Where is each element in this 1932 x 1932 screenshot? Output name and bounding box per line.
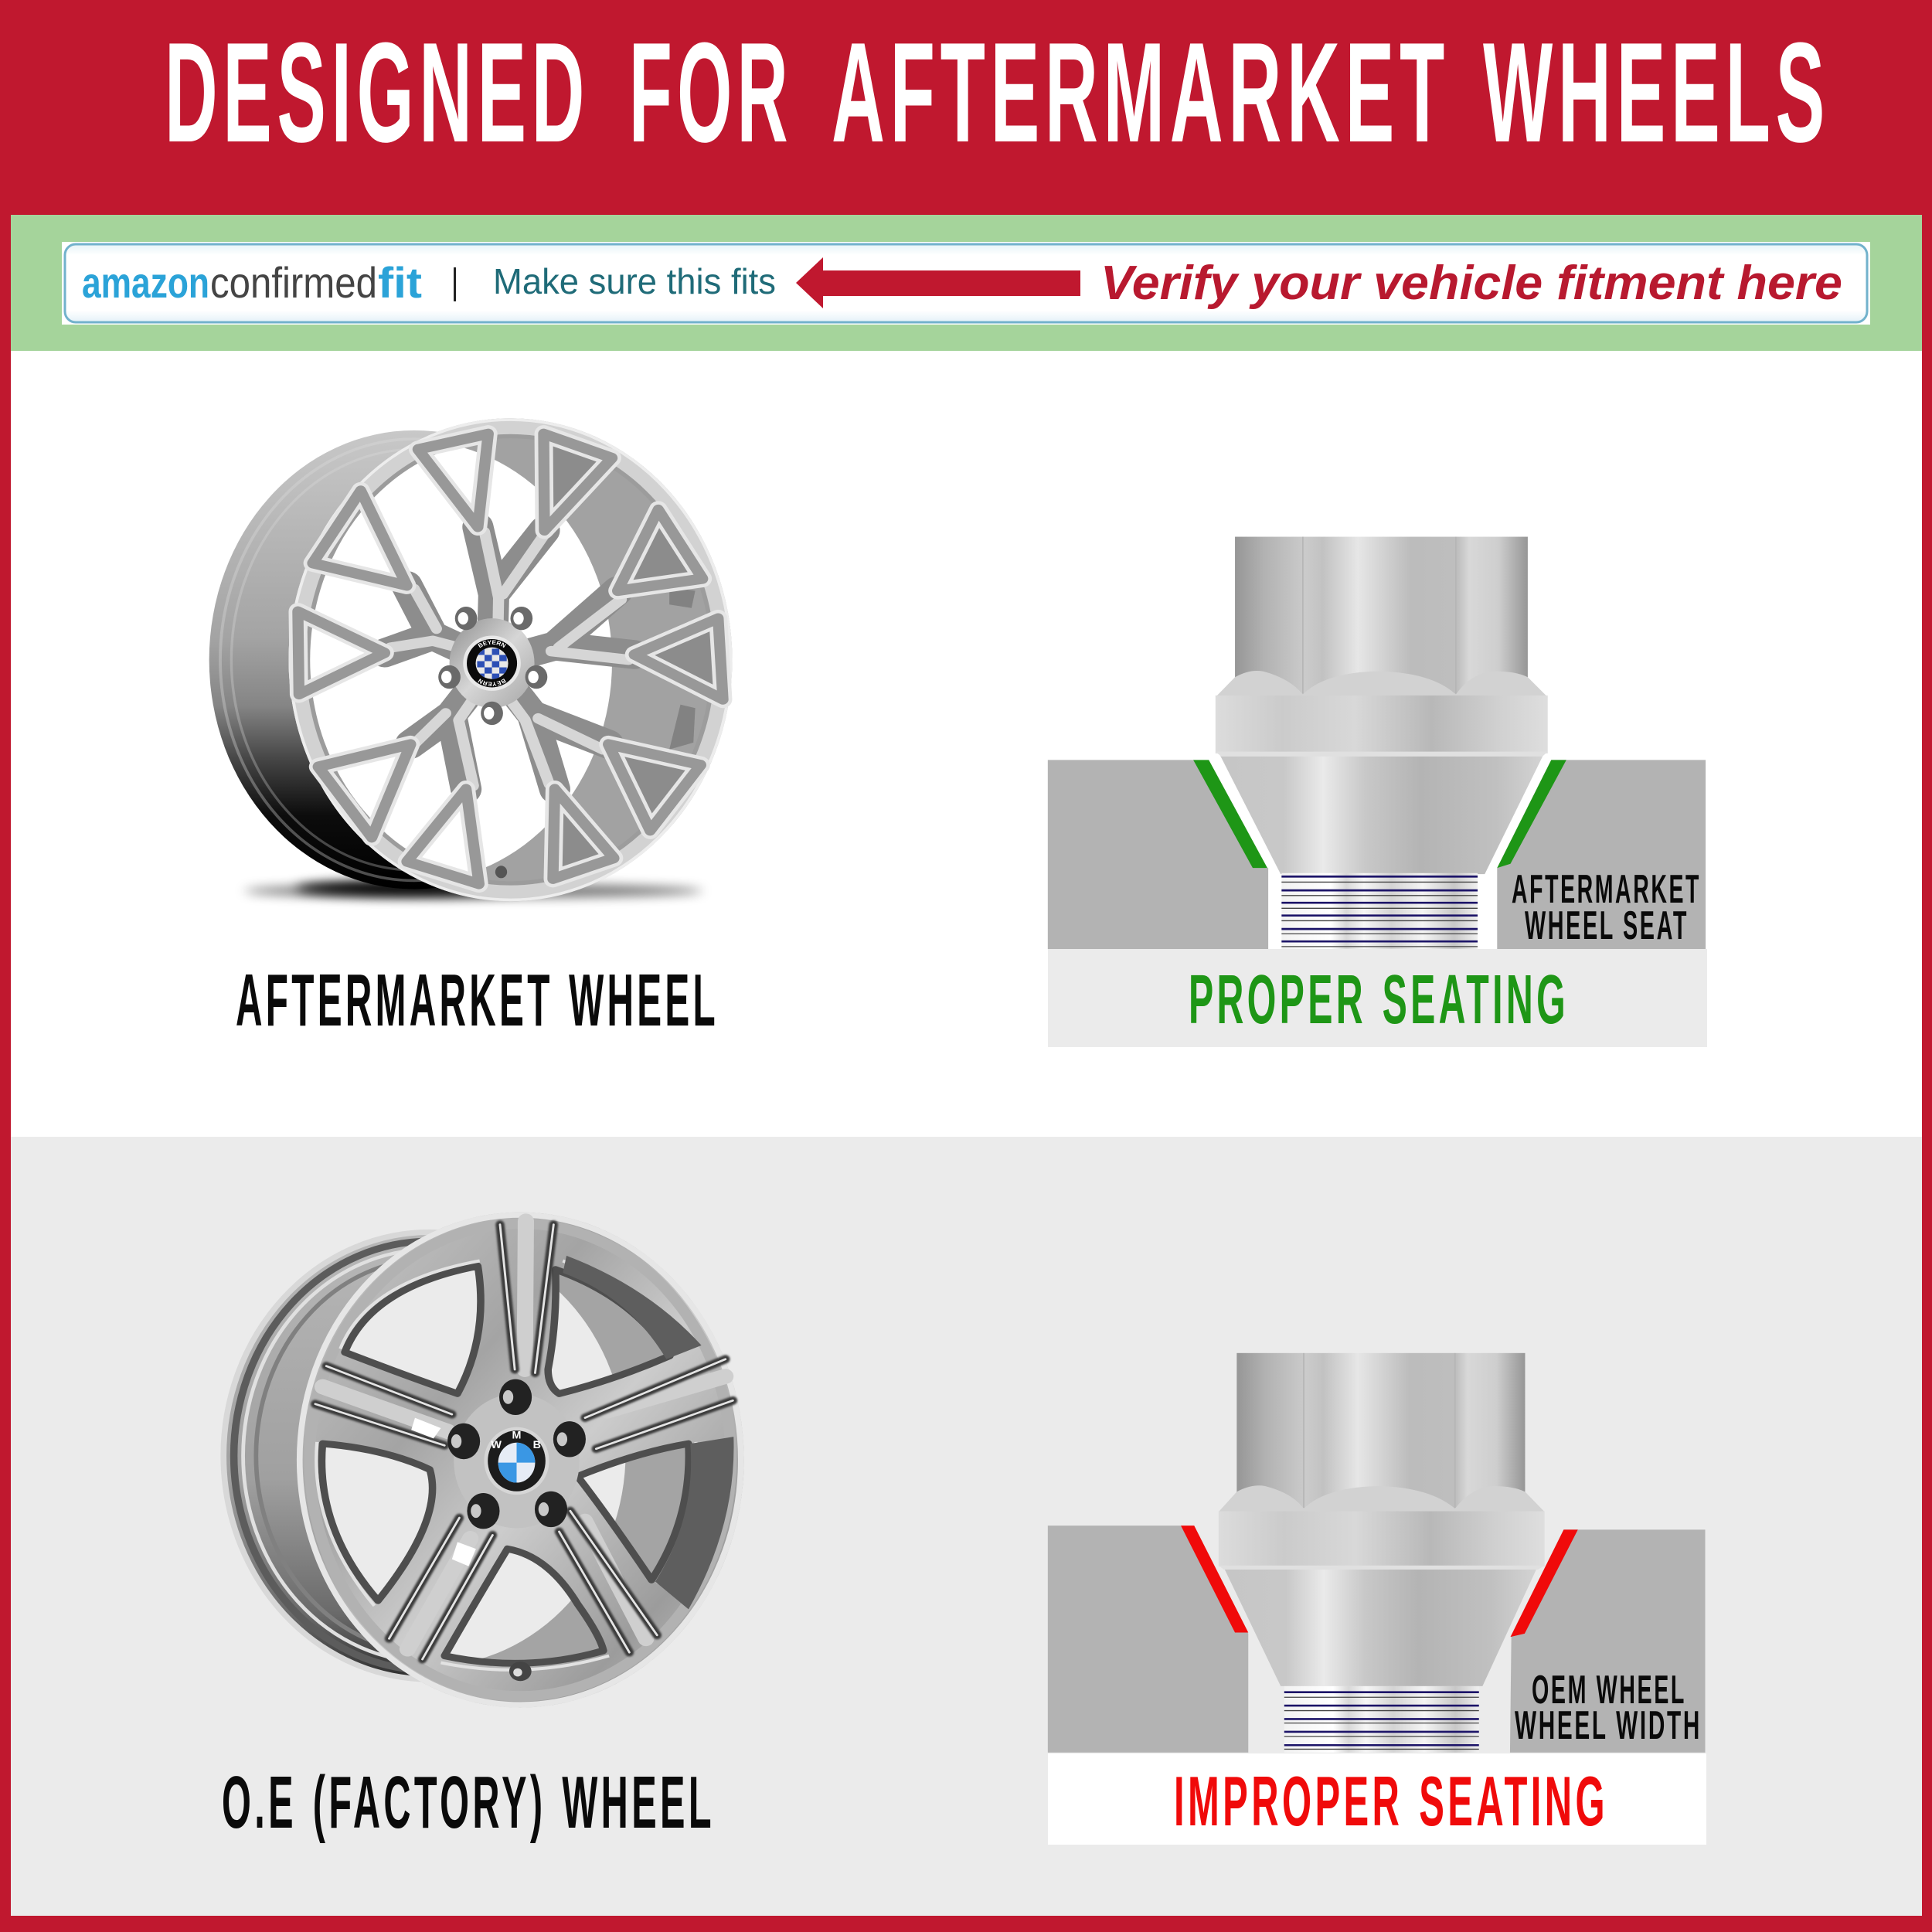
red seat left xyxy=(1181,1526,1248,1633)
centre cap badge: BEYERN xyxy=(478,679,506,686)
wheel block left xyxy=(1048,760,1268,949)
amazon confirmed fit logo: confirmed xyxy=(210,258,377,307)
hub xyxy=(454,1393,580,1528)
centre cap badge: BEYERN xyxy=(478,640,506,648)
valve stem xyxy=(509,1662,532,1681)
title: DESIGNED xyxy=(165,12,590,172)
valve stem xyxy=(495,866,507,878)
BMW style badge xyxy=(484,1427,549,1495)
text: AFTERMARKET WHEEL xyxy=(236,959,719,1042)
lug nut body xyxy=(1216,537,1548,874)
seat label: WHEEL WIDTH xyxy=(1515,1703,1702,1748)
chrome face xyxy=(297,1213,744,1708)
green seat left xyxy=(1193,760,1267,868)
window edges xyxy=(316,1261,696,1670)
spokes xyxy=(385,527,634,789)
wheel block right xyxy=(1510,1529,1705,1753)
nut and seat artwork xyxy=(1048,537,1706,950)
chrome outer pockets xyxy=(563,1256,733,1609)
BMW style badge: M xyxy=(512,1429,521,1440)
spoke grooves xyxy=(315,1221,733,1659)
icon: aftermarket wheel photo xyxy=(209,418,733,907)
lug holes xyxy=(438,607,547,725)
lug holes xyxy=(447,1379,586,1529)
make sure this fits link: Make sure this fits xyxy=(493,261,776,301)
centre cap badge xyxy=(463,635,521,691)
seat label xyxy=(1515,1668,1702,1748)
arrow xyxy=(796,257,1080,308)
title: FOR xyxy=(629,12,793,172)
separator xyxy=(454,267,456,301)
nut and seat artwork xyxy=(1048,1353,1705,1753)
green band xyxy=(11,215,1922,351)
diagram: proper seating lug nut xyxy=(1048,537,1707,1047)
panel: vehicle fitment banner xyxy=(11,215,1922,351)
caption band xyxy=(1048,1753,1706,1845)
lug nut body xyxy=(1219,1353,1545,1686)
panel: factory wheel xyxy=(11,1137,1922,1916)
wheel block left xyxy=(1048,1526,1248,1753)
seat label xyxy=(1512,867,1701,948)
wheel block right xyxy=(1497,760,1706,949)
amazon confirmed fit logo: fit xyxy=(378,258,422,307)
seat label: OEM WHEEL xyxy=(1532,1668,1686,1713)
rim lip xyxy=(290,420,731,900)
label: factory wheel: O.E (FACTORY) WHEEL xyxy=(222,1761,715,1844)
red seat right xyxy=(1511,1529,1578,1637)
thread xyxy=(1284,1686,1479,1753)
verify fitment callout: Verify your vehicle fitment here xyxy=(1100,257,1842,310)
triangular spoke frames xyxy=(298,434,723,884)
icon: factory chrome wheel photo xyxy=(221,1213,747,1708)
caption: proper seating: PROPER SEATING xyxy=(1189,961,1569,1039)
thread xyxy=(1281,873,1478,950)
amazon confirmed fit logo: amazon xyxy=(82,258,209,307)
amazon confirmed fit box xyxy=(62,242,1870,325)
chrome barrel xyxy=(221,1230,638,1682)
wheel face xyxy=(289,418,733,901)
BMW style badge: W xyxy=(491,1438,502,1451)
seat label: AFTERMARKET xyxy=(1512,867,1701,912)
ground shadow xyxy=(244,880,702,898)
diagram: improper seating lug nut xyxy=(1048,1353,1706,1845)
caption band xyxy=(1048,949,1707,1047)
panel: aftermarket wheel xyxy=(11,351,1922,1137)
green seat right xyxy=(1497,760,1566,868)
title xyxy=(165,12,1830,172)
spoke windows xyxy=(325,1270,685,1660)
glare highlights xyxy=(411,1418,476,1566)
amazon confirmed fit logo xyxy=(82,258,422,307)
rim barrel xyxy=(209,430,620,889)
centre hub xyxy=(450,618,535,708)
seat label: WHEEL SEAT xyxy=(1525,903,1689,948)
BMW style badge: B xyxy=(533,1438,541,1451)
